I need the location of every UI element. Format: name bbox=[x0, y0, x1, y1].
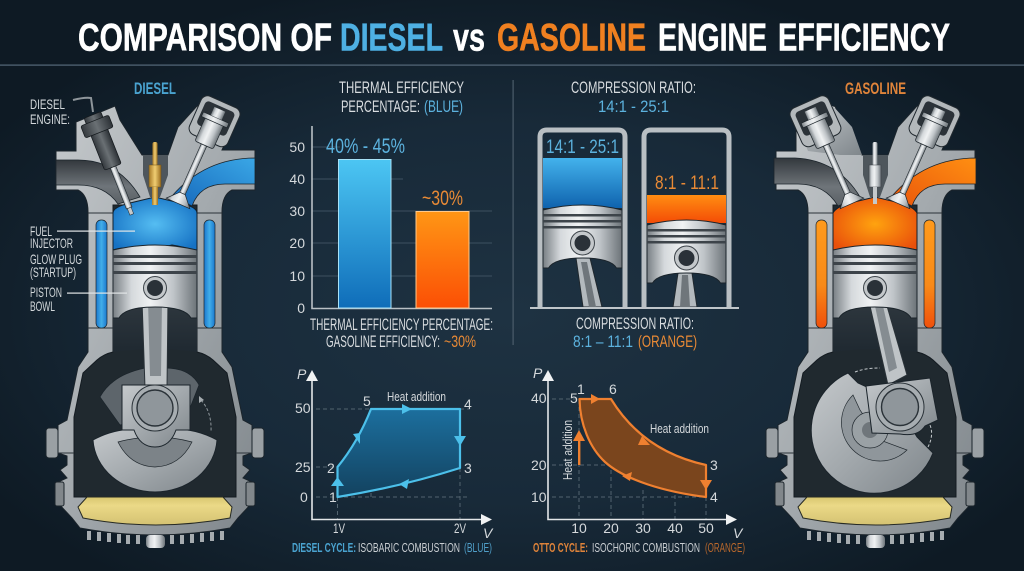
title: vs bbox=[453, 16, 485, 60]
axis labels: 0 bbox=[297, 300, 305, 316]
caption: DIESEL CYCLE: bbox=[292, 540, 356, 555]
diesel cylinder: 14:1 - 25:1 bbox=[546, 137, 619, 158]
injector bbox=[78, 109, 146, 220]
label: glow plug: GLOW PLUG bbox=[30, 251, 82, 267]
cycle area bbox=[338, 409, 460, 497]
axis labels: 4 bbox=[710, 489, 718, 505]
axis labels: 0 bbox=[300, 489, 308, 505]
axis labels: 1V bbox=[333, 520, 345, 536]
annotation: heat addition: Heat addition bbox=[387, 389, 446, 404]
title bbox=[78, 16, 950, 60]
caption bbox=[533, 540, 745, 555]
axis labels: 30 bbox=[289, 203, 305, 219]
chart caption: ~30% bbox=[444, 332, 476, 351]
axis labels: 40 bbox=[289, 171, 305, 187]
rod big end bbox=[122, 385, 190, 447]
caption: 8:1 – 11:1 bbox=[573, 332, 633, 351]
axis bbox=[312, 126, 492, 308]
annotation: heat addition: Heat addition bbox=[650, 421, 709, 436]
axis labels: 6 bbox=[609, 381, 617, 397]
chart heading: THERMAL EFFICIENCY bbox=[339, 78, 464, 97]
engine block bbox=[766, 106, 984, 548]
axis labels: 3 bbox=[710, 457, 718, 473]
exhaust port bbox=[774, 158, 860, 206]
panel: otto pv diagram bbox=[531, 365, 745, 555]
value: gasoline: ~30% bbox=[422, 187, 463, 210]
axis labels bbox=[295, 366, 494, 541]
guide lines bbox=[552, 399, 706, 519]
axis labels: 10 bbox=[531, 489, 547, 505]
engine block bbox=[46, 106, 264, 548]
label: piston bowl: BOWL bbox=[30, 298, 55, 314]
label: fuel injector: INJECTOR bbox=[30, 235, 73, 251]
bar: diesel bbox=[338, 160, 391, 308]
chart heading: (BLUE) bbox=[424, 97, 463, 116]
connecting rod bbox=[870, 306, 907, 385]
axis labels: V bbox=[733, 525, 744, 541]
heat arrow bbox=[573, 430, 585, 465]
axis labels: P bbox=[297, 366, 307, 382]
axis labels: 1 bbox=[329, 489, 337, 505]
axis labels: 5 bbox=[570, 390, 578, 406]
flow arrows bbox=[591, 394, 712, 490]
panel: diesel pv diagram bbox=[292, 366, 494, 555]
glow plug bbox=[143, 142, 168, 205]
caption bbox=[573, 314, 697, 351]
title: EFFICIENCY bbox=[778, 16, 950, 60]
rod big end bbox=[866, 378, 938, 435]
title: COMPARISON OF bbox=[78, 16, 332, 60]
axis labels: 3 bbox=[464, 460, 472, 476]
diesel cylinder bbox=[540, 130, 625, 308]
guide lines bbox=[316, 409, 470, 519]
counterweight bbox=[811, 373, 933, 493]
label: glow plug bbox=[30, 251, 82, 280]
bar: gasoline bbox=[416, 212, 469, 308]
axis labels: 40 bbox=[531, 390, 547, 406]
left tower bbox=[795, 106, 862, 155]
caption: ISOBARIC COMBUSTION bbox=[358, 540, 460, 555]
exhaust valve bbox=[788, 94, 871, 212]
combustion chamber bbox=[833, 197, 917, 251]
crank dashed path bbox=[855, 368, 932, 447]
caption: (ORANGE) bbox=[638, 332, 697, 351]
axis labels: 50 bbox=[289, 139, 305, 155]
piston bbox=[833, 245, 917, 318]
axis labels: 30 bbox=[635, 520, 651, 536]
heading: diesel: DIESEL bbox=[134, 80, 176, 98]
axis labels: V bbox=[483, 525, 494, 541]
grid lines bbox=[312, 147, 492, 276]
label: diesel engine: DIESEL bbox=[30, 96, 65, 112]
intake port bbox=[172, 158, 255, 206]
heading: gasoline: GASOLINE bbox=[845, 80, 906, 98]
axis labels: 2 bbox=[327, 460, 335, 476]
axis labels bbox=[531, 365, 744, 541]
axis labels: 20 bbox=[603, 520, 619, 536]
piston bbox=[113, 245, 197, 318]
crank disc bbox=[100, 368, 199, 425]
gasoline cylinder: 8:1 - 11:1 bbox=[655, 173, 719, 194]
intake port bbox=[892, 158, 976, 206]
counterweight bbox=[93, 429, 217, 492]
axis labels: 20 bbox=[531, 457, 547, 473]
title: DIESEL bbox=[340, 16, 443, 60]
axis labels: 10 bbox=[571, 520, 587, 536]
label: diesel engine: ENGINE: bbox=[30, 111, 70, 127]
label: piston bowl bbox=[30, 284, 127, 314]
label: piston bowl: PISTON bbox=[30, 284, 62, 300]
axis labels: 5 bbox=[363, 393, 371, 409]
panel: compression ratio bbox=[530, 78, 739, 351]
flow arrows bbox=[331, 404, 466, 489]
label: diesel engine bbox=[30, 96, 70, 127]
intake valve bbox=[159, 94, 242, 212]
chart heading bbox=[339, 78, 464, 116]
panel: diesel engine bbox=[30, 80, 264, 548]
axis labels: 10 bbox=[289, 268, 305, 284]
connecting rod bbox=[142, 300, 168, 388]
axis labels: 40 bbox=[667, 520, 683, 536]
fuel line bbox=[73, 98, 93, 112]
axis labels: 20 bbox=[289, 235, 305, 251]
axis labels: 50 bbox=[698, 520, 714, 536]
label: fuel injector bbox=[30, 223, 135, 251]
panel: gasoline engine bbox=[766, 80, 984, 548]
water jackets bbox=[96, 220, 215, 328]
annotation: vertical heat addition: Heat addition bbox=[560, 420, 575, 480]
chart caption: THERMAL EFFICIENCY PERCENTAGE: bbox=[310, 315, 493, 334]
water jackets bbox=[816, 220, 935, 328]
heading: 14:1 - 25:1 bbox=[598, 97, 669, 116]
exhaust port bbox=[56, 160, 140, 204]
label: glow plug: (STARTUP) bbox=[30, 264, 76, 280]
caption: (ORANGE) bbox=[705, 540, 745, 555]
axis labels: 25 bbox=[295, 459, 311, 475]
intake valve bbox=[879, 94, 962, 212]
caption: (BLUE) bbox=[464, 540, 492, 555]
title: GASOLINE bbox=[497, 16, 646, 60]
caption bbox=[292, 540, 492, 555]
chart caption bbox=[310, 315, 493, 351]
gasoline cylinder bbox=[644, 130, 729, 308]
label: fuel injector: FUEL bbox=[30, 223, 52, 239]
rotation arrow bbox=[199, 396, 211, 432]
heading: COMPRESSION RATIO: bbox=[571, 78, 696, 97]
heading bbox=[571, 78, 696, 116]
title: ENGINE bbox=[658, 16, 767, 60]
caption: COMPRESSION RATIO: bbox=[576, 314, 694, 333]
spark plug bbox=[863, 142, 888, 204]
axis labels: 2V bbox=[454, 520, 466, 536]
axes bbox=[542, 370, 737, 525]
axis labels: 1 bbox=[577, 381, 585, 397]
axis labels bbox=[289, 139, 305, 316]
axes bbox=[306, 370, 492, 525]
panel: thermal efficiency bar chart bbox=[289, 78, 493, 351]
axis labels: 50 bbox=[295, 400, 311, 416]
caption: OTTO CYCLE: bbox=[533, 540, 588, 555]
chart caption: GASOLINE EFFICIENCY: bbox=[326, 332, 440, 351]
axis labels: P bbox=[533, 365, 543, 381]
axis labels: 4 bbox=[464, 396, 472, 412]
combustion chamber bbox=[113, 197, 197, 251]
chart heading: PERCENTAGE: bbox=[341, 97, 420, 116]
value: diesel: 40% - 45% bbox=[326, 135, 405, 158]
caption: ISOCHORIC COMBUSTION bbox=[592, 540, 700, 555]
cycle area bbox=[580, 399, 706, 497]
